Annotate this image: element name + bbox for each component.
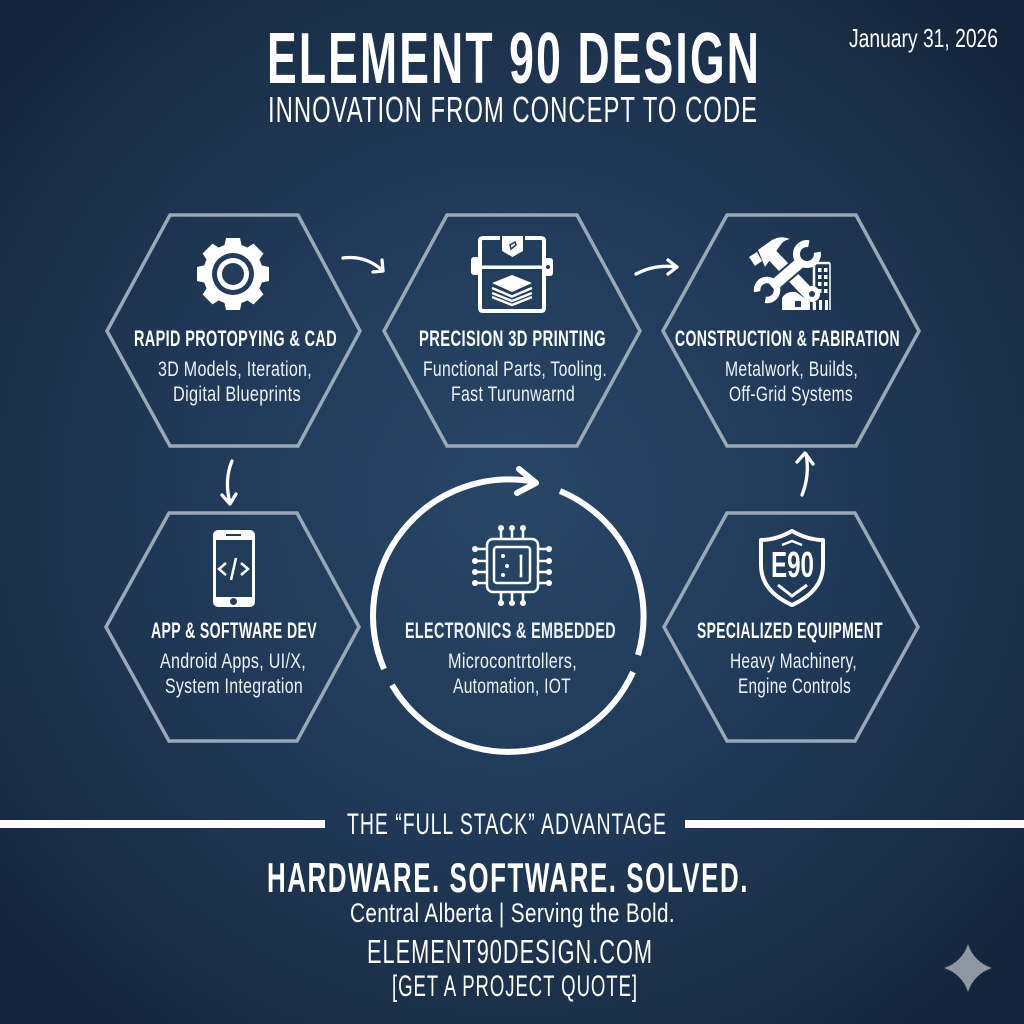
description: Functional Parts, Tooling. (423, 357, 607, 381)
panel: rapid prototyping and CAD (107, 215, 360, 446)
heading: PRECISION 3D PRINTING (419, 326, 606, 351)
icon: sparkle star (944, 944, 992, 992)
description (730, 649, 857, 698)
website: ELEMENT90DESIGN.COM (367, 933, 653, 970)
circular arrow ring (373, 469, 644, 752)
heading: RAPID PROTOPYING & CAD (134, 326, 337, 351)
description: Metalwork, Builds, (725, 357, 858, 381)
divider right (685, 820, 1024, 828)
description: Microcontrtollers, (448, 649, 577, 673)
description: Android Apps, UI/X, (160, 649, 306, 673)
panel: app and software dev (106, 513, 359, 741)
description (725, 357, 858, 406)
icon: E90 shield (761, 531, 823, 605)
icon: gear (197, 238, 269, 310)
icon: smartphone with code (213, 530, 255, 607)
panel: precision 3D printing (384, 215, 640, 446)
description: Automation, IOT (453, 674, 571, 698)
call to action: [GET A PROJECT QUOTE] (392, 970, 638, 1003)
description (158, 357, 312, 406)
heading: CONSTRUCTION & FABIRATION (675, 326, 900, 351)
arrow: printing to construction (636, 260, 677, 274)
divider left (0, 820, 325, 828)
subtitle: INNOVATION FROM CONCEPT TO CODE (268, 89, 758, 130)
description (160, 649, 306, 698)
icon: 3D printer (471, 236, 553, 311)
arrow: equipment up to construction (797, 453, 813, 495)
panel: specialized equipment (664, 513, 918, 741)
description: Off-Grid Systems (729, 382, 853, 406)
description: System Integration (165, 674, 303, 698)
heading: SPECIALIZED EQUIPMENT (697, 618, 883, 643)
icon: E90 shield: E90 (771, 544, 814, 585)
heading: ELECTRONICS & EMBEDDED (405, 618, 616, 643)
description (423, 357, 607, 406)
location line: Central Alberta | Serving the Bold. (350, 898, 675, 928)
description: Heavy Machinery, (730, 649, 857, 673)
description (448, 649, 577, 698)
icon: hammer, wrench and building (749, 237, 830, 310)
arrow: prototyping down to app (222, 461, 236, 504)
arrow: prototyping to printing (343, 258, 383, 272)
panel: electronics and embedded circular loop (373, 469, 644, 752)
description: Fast Turunwarnd (451, 382, 575, 406)
panel: construction and fabrication (663, 215, 919, 446)
full stack heading: THE “FULL STACK” ADVANTAGE (347, 808, 667, 841)
description: Engine Controls (738, 674, 851, 698)
icon: microchip (472, 525, 552, 606)
heading: APP & SOFTWARE DEV (151, 618, 317, 643)
description: 3D Models, Iteration, (158, 357, 312, 381)
description: Digital Blueprints (173, 382, 301, 406)
